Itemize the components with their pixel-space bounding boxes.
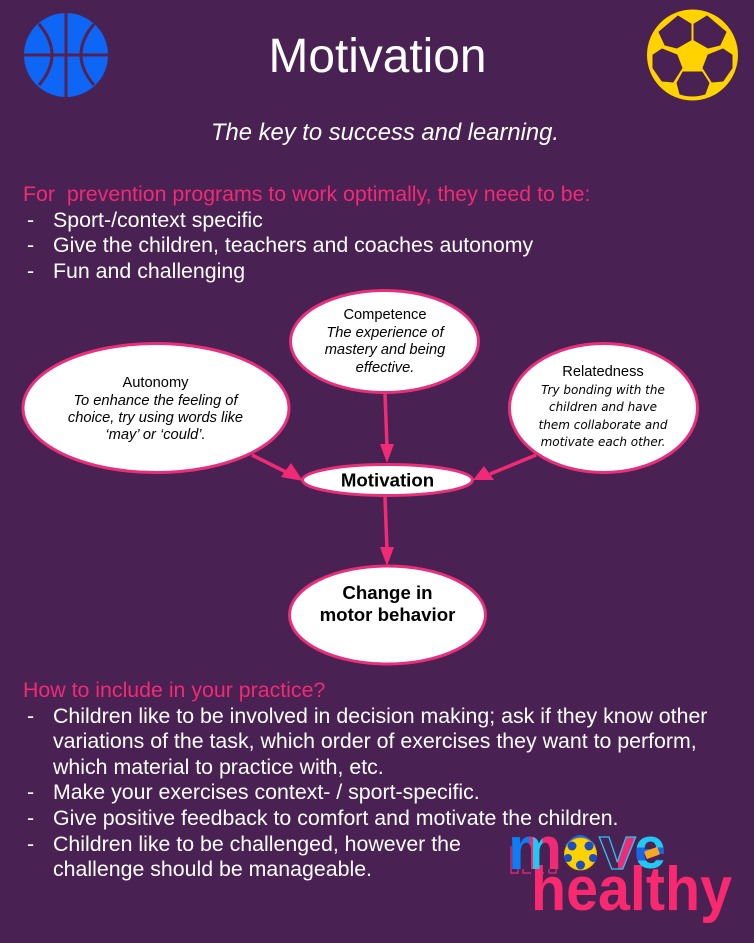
list: practice tips: Children like to be challenged, however the	[53, 832, 461, 856]
node: motivation	[302, 464, 472, 496]
node: change in motor behavior: Change in	[342, 582, 433, 603]
node: competence: The experience of	[326, 325, 446, 341]
list: practice tips: -	[27, 806, 34, 830]
list: practice tips: -	[27, 704, 34, 728]
arrow: competence to motivation	[380, 393, 394, 463]
list: program requirements: Sport-/context specific	[53, 208, 263, 232]
list: program requirements	[27, 208, 534, 283]
list: practice tips	[27, 704, 707, 881]
arrow: autonomy to motivation	[252, 455, 303, 481]
node: competence: Competence	[343, 307, 427, 323]
list: practice tips: Give positive feedback to comfort and motivate the children.	[53, 806, 618, 830]
node: autonomy: Autonomy	[122, 375, 189, 391]
list: practice tips: challenge should be manageable.	[53, 857, 372, 881]
node: autonomy: choice, try using words like	[68, 410, 243, 426]
icon: soccer ball	[647, 10, 738, 100]
list: practice tips: Make your exercises context- / sport-specific.	[53, 780, 480, 804]
node: relatedness: motivate each other.	[541, 435, 665, 449]
arrow: relatedness to motivation	[473, 455, 536, 480]
logo: move healthy: m	[508, 815, 562, 882]
list: practice tips: -	[27, 832, 34, 856]
node: autonomy	[23, 344, 289, 472]
node: relatedness: children and have	[549, 400, 657, 414]
list: practice tips: Children like to be involved in decision making; ask if they know other	[53, 704, 707, 728]
list: program requirements: -	[27, 233, 34, 257]
node: autonomy: To enhance the feeling of	[73, 393, 239, 409]
node: relatedness: Try bonding with the	[541, 383, 665, 397]
logo: move healthy: healthy	[531, 855, 732, 924]
subtitle: The key to success and learning.	[211, 119, 559, 146]
node: relatedness: them collaborate and	[539, 418, 668, 432]
heading: prevention programs: For prevention programs to work optimally, they need to be:	[23, 182, 590, 206]
logo: move healthy: v	[599, 815, 637, 882]
node: competence	[290, 290, 478, 392]
heading: how to include: How to include in your practice?	[23, 678, 325, 702]
node: change in motor behavior: motor behavior	[320, 604, 455, 625]
arrow: motivation to change	[380, 497, 394, 566]
node: relatedness	[510, 344, 698, 472]
node: change in motor behavior	[290, 566, 486, 664]
list: program requirements: Give the children, teachers and coaches autonomy	[53, 233, 534, 257]
node: relatedness: Relatedness	[562, 364, 644, 380]
list: program requirements: -	[27, 208, 34, 232]
list: program requirements: Fun and challenging	[53, 259, 245, 283]
logo: move healthy: e	[634, 816, 666, 881]
title: Motivation	[268, 30, 486, 83]
list: program requirements: -	[27, 259, 34, 283]
node: competence: mastery and being	[325, 342, 446, 358]
node: competence: effective.	[356, 360, 414, 376]
node: motivation: Motivation	[341, 470, 434, 490]
node: autonomy: ‘may’ or ‘could’.	[105, 427, 206, 443]
list: practice tips: variations of the task, which order of exercises they want to perform,	[53, 729, 697, 753]
list: practice tips: which material to practice with, etc.	[52, 755, 384, 779]
logo: move healthy	[508, 815, 732, 924]
icon: basketball	[24, 13, 108, 97]
list: practice tips: -	[27, 780, 34, 804]
